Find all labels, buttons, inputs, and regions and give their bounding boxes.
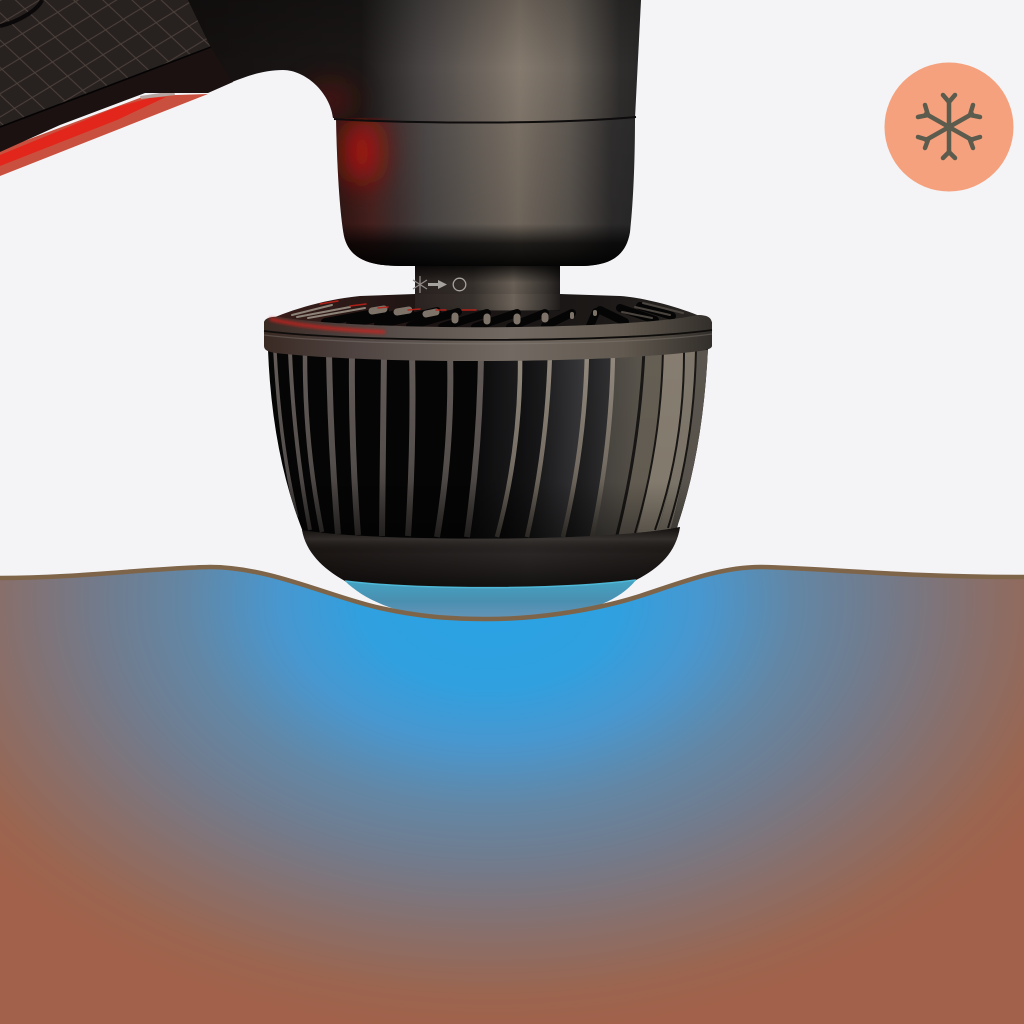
grip edge line: [0, 47, 211, 127]
neck base overlay: [415, 294, 560, 310]
diamond grip texture: [0, 0, 216, 127]
skin surface outline: [0, 567, 1024, 619]
treatment head top disc: [264, 294, 712, 328]
device neck: [413, 266, 560, 314]
handle lower band: [0, 44, 233, 152]
treatment head rim: [264, 315, 712, 361]
red reflection: [270, 319, 385, 332]
fin faces: [467, 350, 710, 540]
device upper body: [188, 0, 641, 122]
disc vents: [292, 301, 683, 327]
treatment head base bowl: [302, 527, 680, 588]
lit fin bars: [497, 352, 613, 537]
device handle: [0, 0, 233, 176]
dark fin bars: [275, 352, 481, 537]
skin cross-section with cold spread: [0, 567, 1024, 1024]
red light strip: [0, 91, 208, 176]
cooling tip: [345, 580, 636, 618]
circle marking: [453, 278, 466, 291]
arrow marking: [428, 280, 447, 289]
icon: small snowflake marking: [413, 276, 427, 293]
treatment head finned body: [268, 348, 710, 540]
button ring: [0, 0, 42, 26]
fin separation lines: [617, 350, 696, 535]
device collar: [334, 116, 636, 266]
icon: snowflake badge: [884, 62, 1014, 192]
